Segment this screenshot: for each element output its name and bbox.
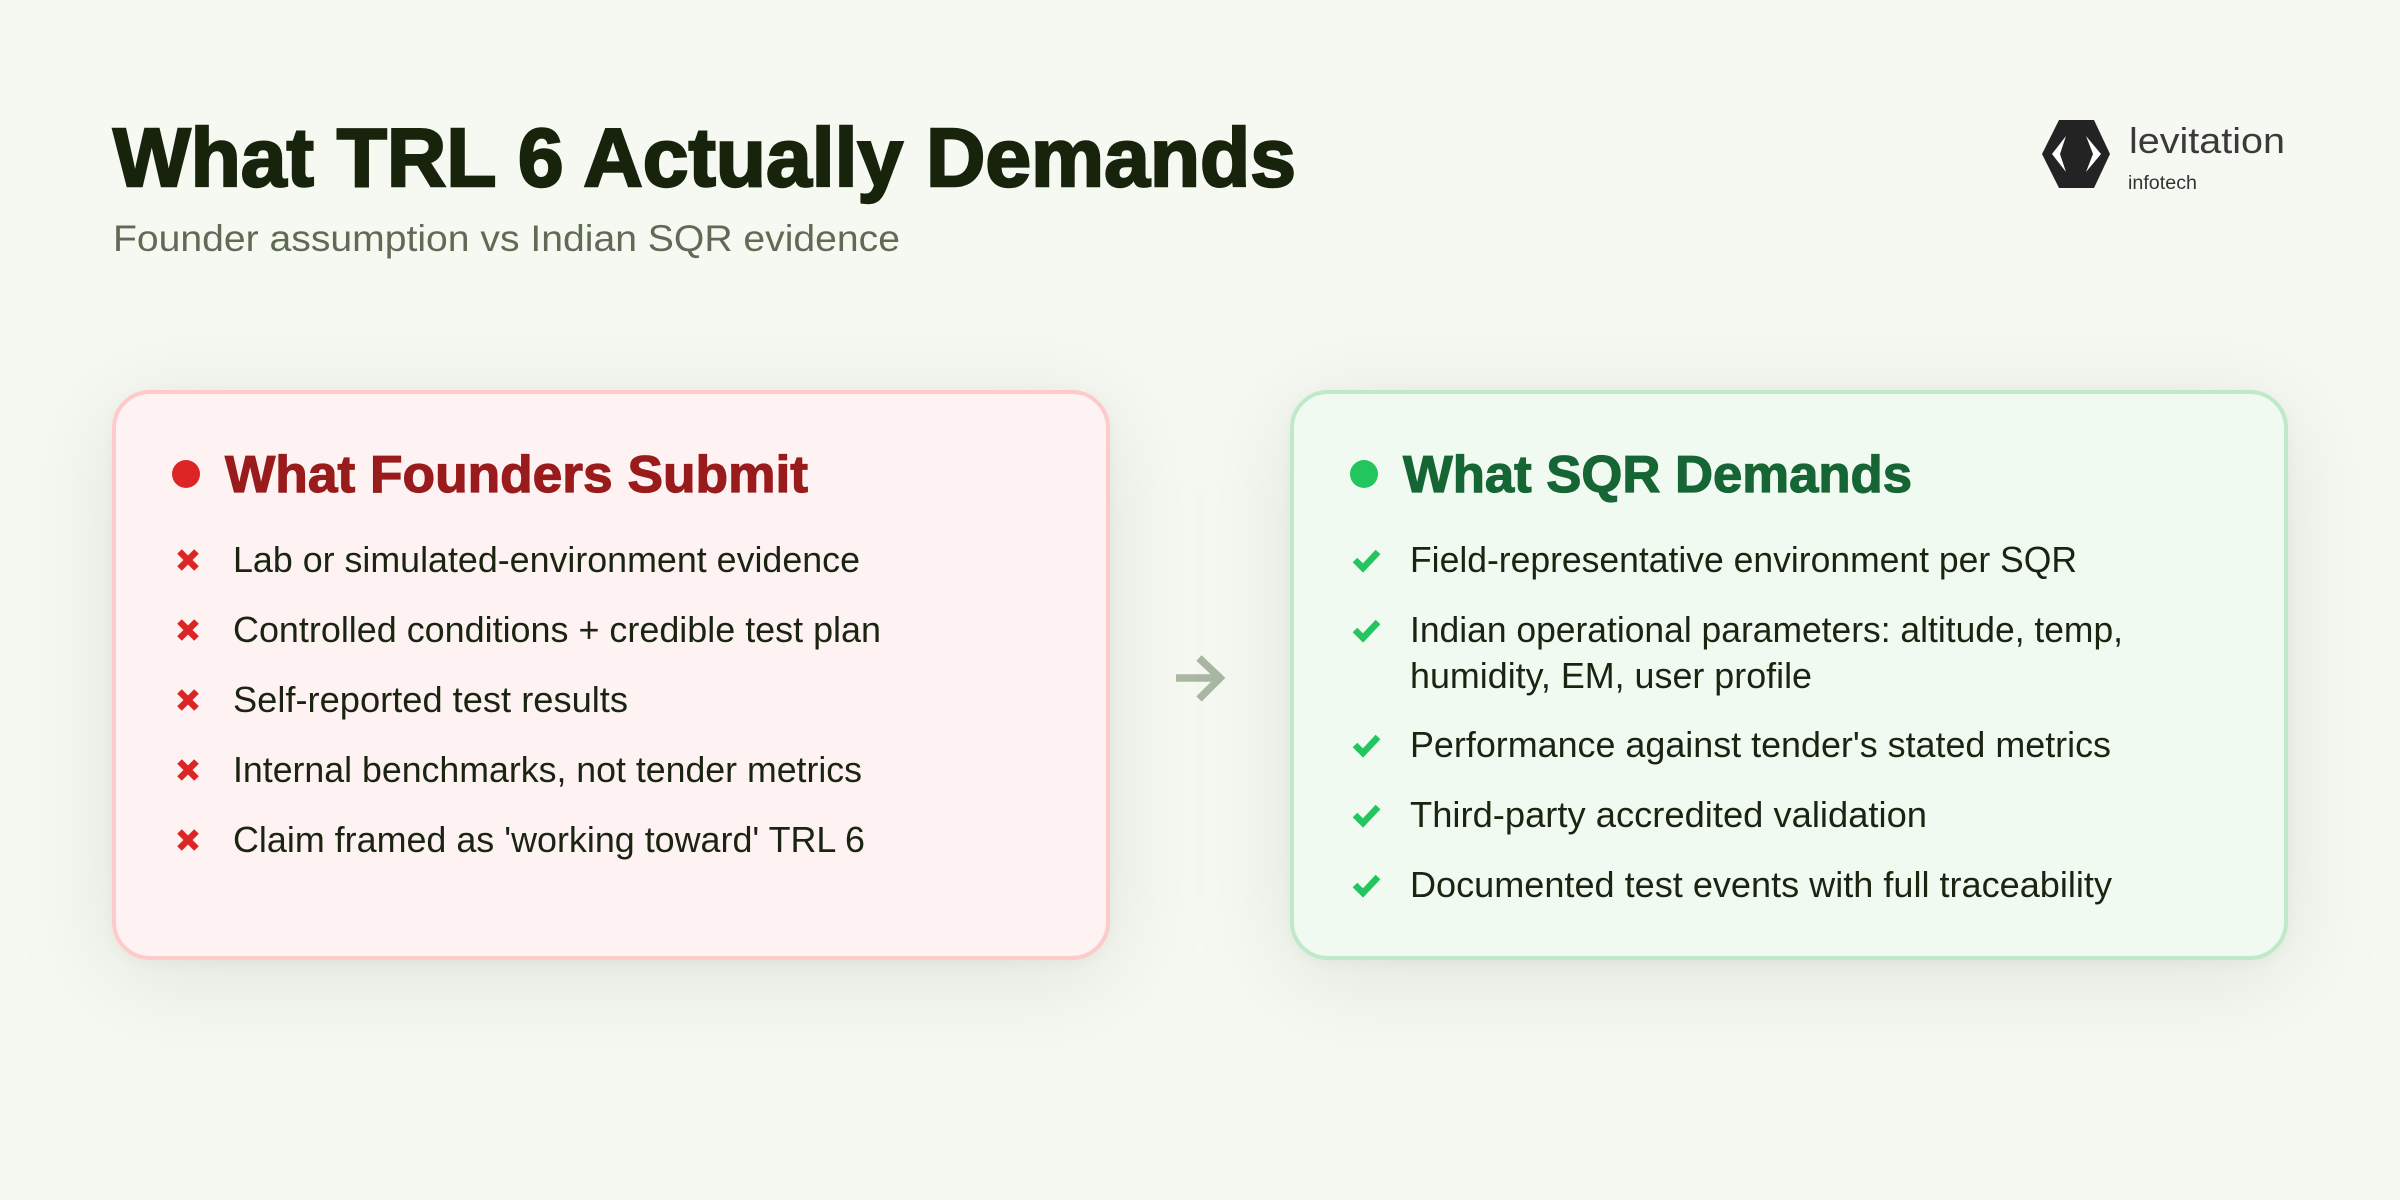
panel: what founders submit xyxy=(114,392,1108,958)
item 5: Documented test events with full traceability xyxy=(1410,864,2112,905)
item 5: Claim framed as 'working toward' TRL 6 xyxy=(233,819,865,860)
icon: hexagon logo mark xyxy=(2042,120,2110,188)
item 4: Third-party accredited validation xyxy=(1410,794,1927,835)
header xyxy=(113,111,1296,259)
arrow xyxy=(1176,658,1222,699)
item 2: Controlled conditions + credible test plan xyxy=(233,609,881,650)
item 1: Lab or simulated-environment evidence xyxy=(233,539,860,580)
heading: What SQR Demands xyxy=(1403,446,1912,504)
icon: green dot xyxy=(1350,460,1378,488)
item 2: Indian operational parameters: altitude, temp, xyxy=(1410,609,2123,650)
logo: levitation infotech xyxy=(2042,120,2285,194)
item 4: Internal benchmarks, not tender metrics xyxy=(233,749,862,790)
subtitle: Founder assumption vs Indian SQR evidence xyxy=(113,218,900,259)
item 2: humidity, EM, user profile xyxy=(1410,655,1812,696)
heading: What Founders Submit xyxy=(225,446,808,504)
logo sub-wordmark: infotech xyxy=(2128,173,2197,194)
item 3: Performance against tender's stated metrics xyxy=(1410,724,2111,765)
title: What TRL 6 Actually Demands xyxy=(113,111,1296,204)
panel background xyxy=(1292,392,2286,958)
item 1: Field-representative environment per SQR xyxy=(1410,539,2077,580)
item 3: Self-reported test results xyxy=(233,679,628,720)
icon: red dot xyxy=(172,460,200,488)
logo wordmark: levitation xyxy=(2129,120,2285,161)
panel: what sqr demands xyxy=(1292,392,2286,958)
panel background xyxy=(114,392,1108,958)
item 2 xyxy=(1355,609,2123,696)
